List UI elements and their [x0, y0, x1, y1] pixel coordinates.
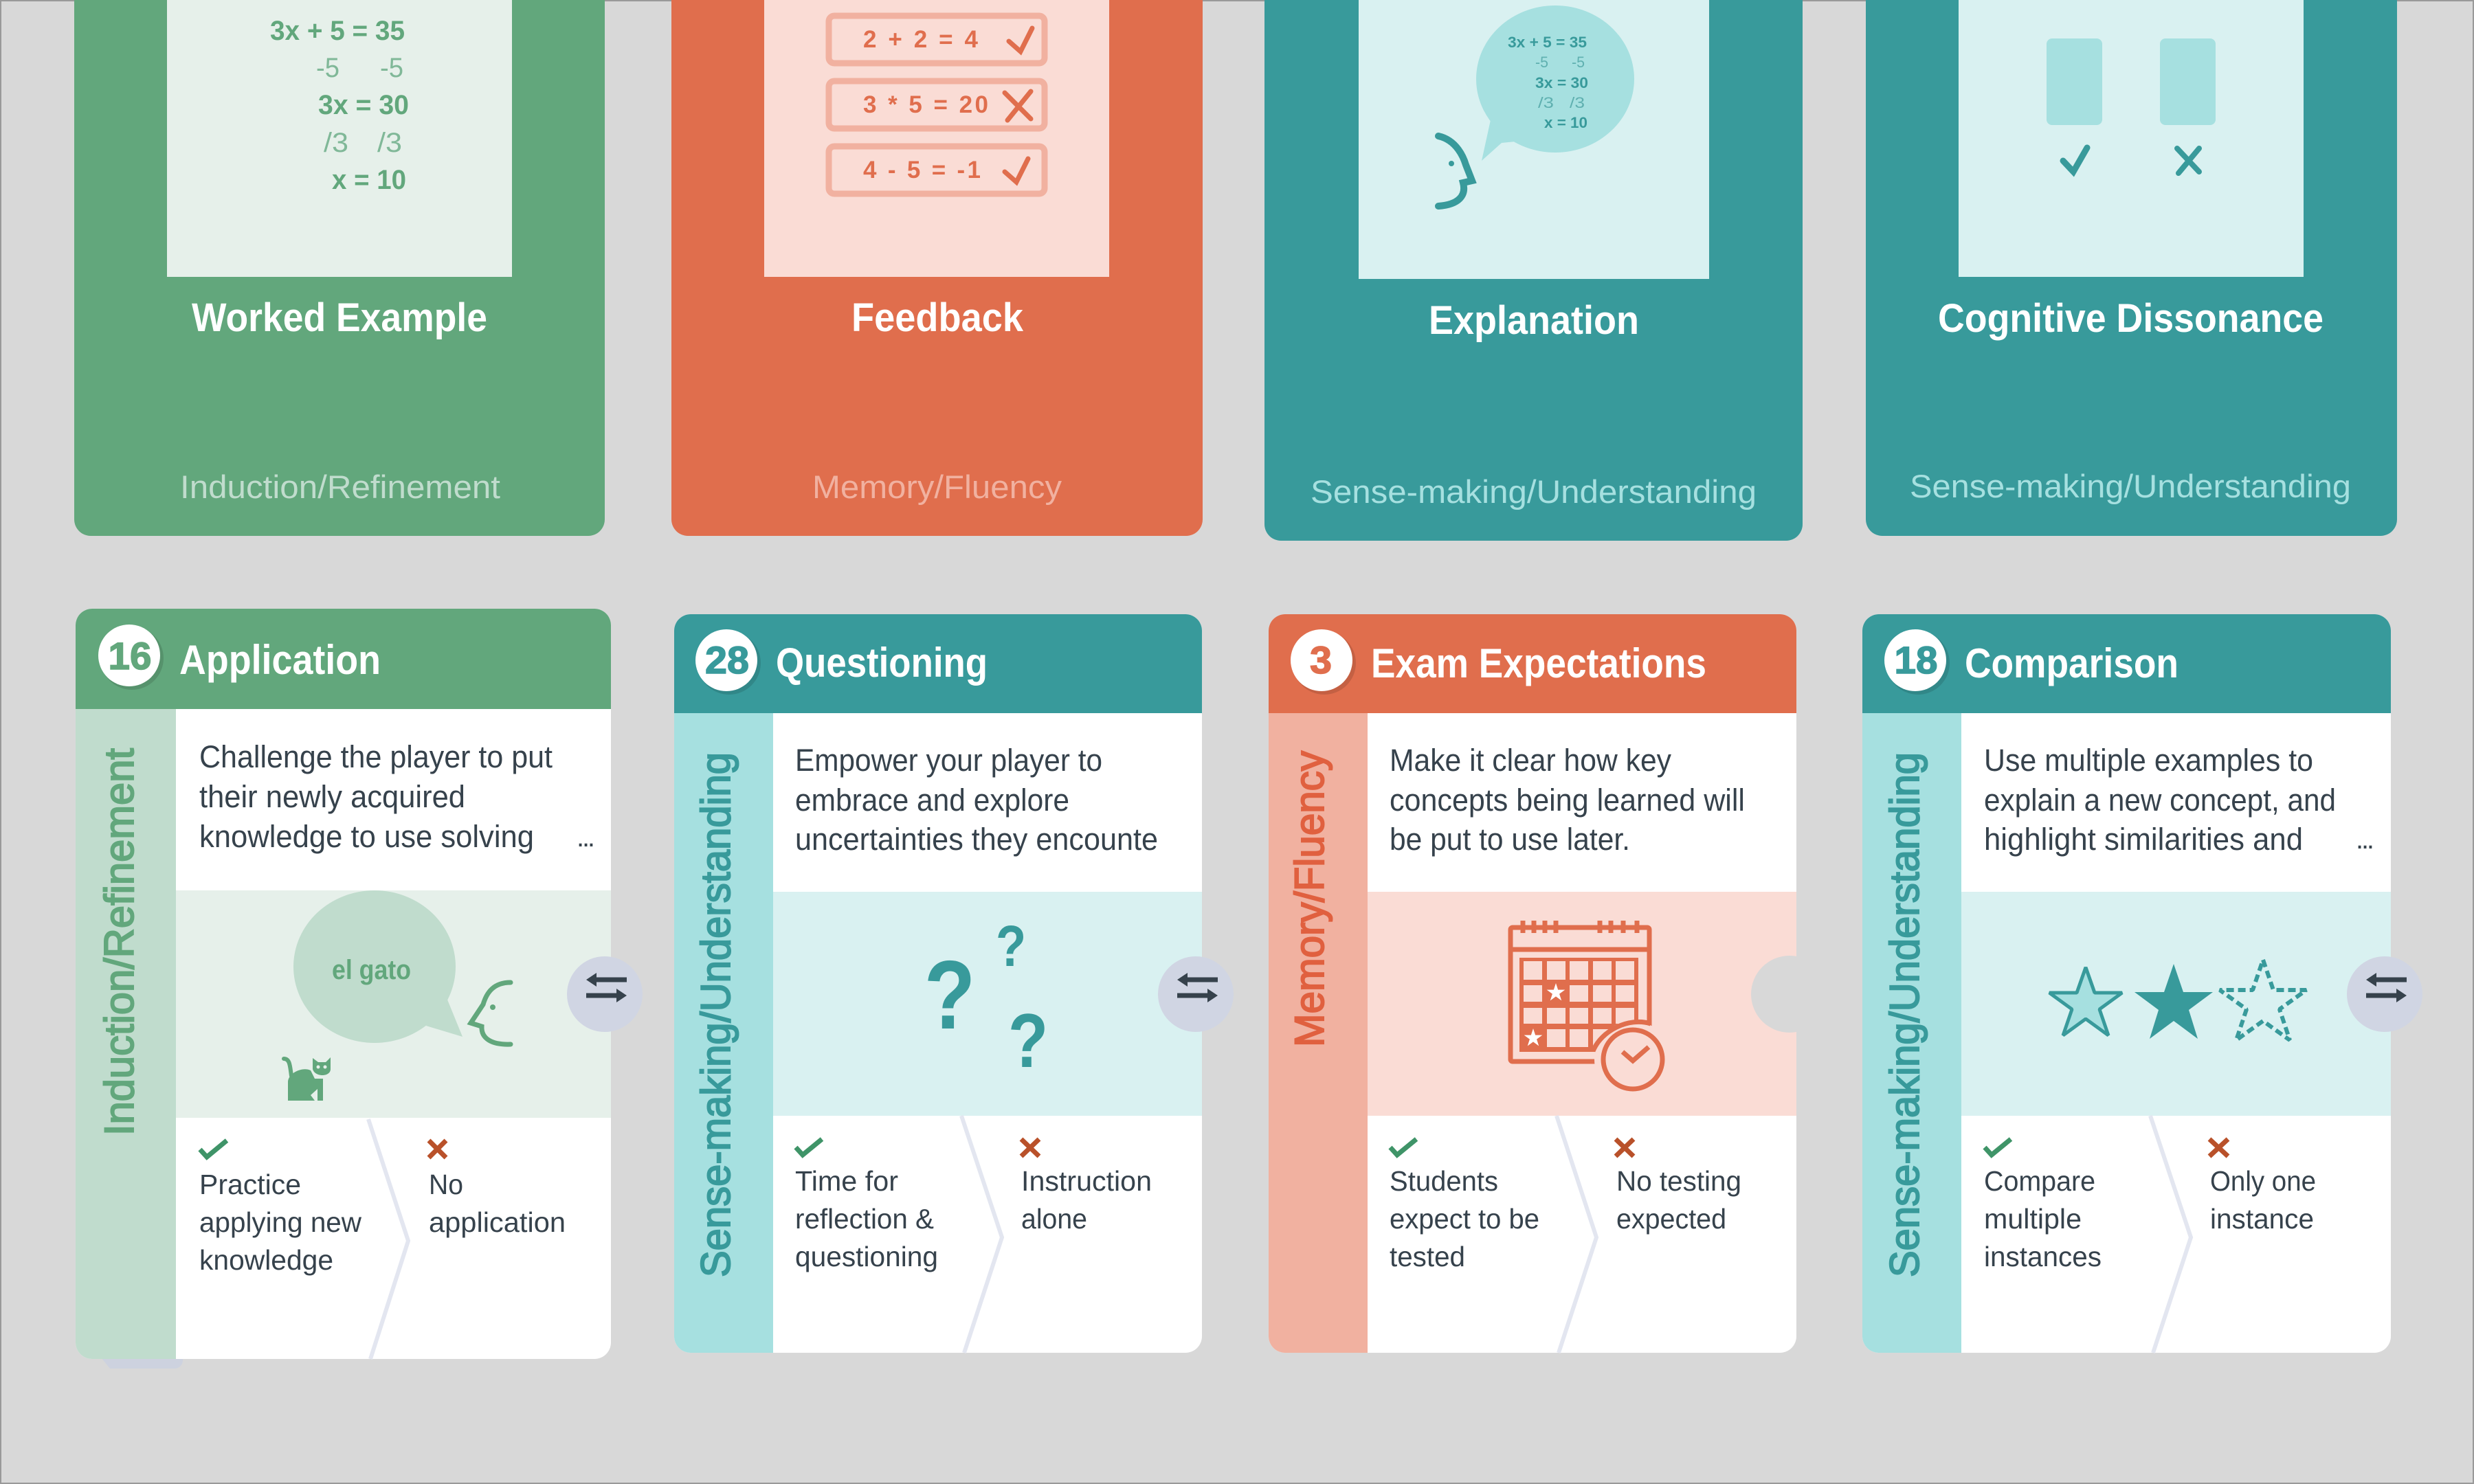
do example [1984, 1139, 2102, 1272]
don't example [1616, 1139, 1741, 1235]
description [1984, 743, 2376, 857]
card title: Cognitive Dissonance [1938, 296, 2323, 341]
do and don't divider arrow [961, 1116, 1002, 1353]
do and don't divider arrow [1557, 1116, 1596, 1353]
icon: speech bubble with math: -5 [1535, 54, 1548, 71]
do example: instances [1984, 1241, 2102, 1272]
panel: Questioning card [674, 614, 1234, 1353]
do example: questioning [795, 1241, 938, 1272]
number badge: 18 [1894, 638, 1938, 682]
worked math steps: -5 [380, 53, 403, 83]
icon: speech bubble with math [1476, 5, 1634, 161]
description: be put to use later. [1390, 822, 1630, 857]
description: their newly acquired [199, 779, 465, 814]
number badge: 3 [1310, 638, 1332, 682]
do example [795, 1139, 938, 1272]
illustration: question marks: ? [1008, 998, 1048, 1083]
worked math steps: 3x + 5 = 35 [270, 16, 405, 46]
don't example: alone [1021, 1203, 1087, 1235]
panel: Worked Example card [74, 0, 605, 536]
icon: face profile [1438, 136, 1472, 206]
description: Challenge the player to put [199, 739, 553, 774]
description: concepts being learned will [1390, 783, 1745, 818]
description: explain a new concept, and [1984, 783, 2336, 818]
do example: expect to be [1390, 1203, 1539, 1235]
vertical category label: Induction/Refinement [96, 748, 142, 1136]
icon: speech bubble with math: /3 [1570, 94, 1585, 111]
do example: Compare [1984, 1165, 2095, 1197]
don't example: No testing [1616, 1165, 1741, 1197]
illustration: three stars [1961, 892, 2391, 1116]
number badge [695, 629, 761, 695]
number badge [98, 625, 164, 690]
panel: Feedback card [671, 0, 1203, 536]
illustration: question marks [773, 892, 1202, 1116]
number badge [1884, 629, 1950, 695]
don't example: expected [1616, 1203, 1726, 1235]
feedback rows: 2 + 2 = 4 [863, 26, 979, 53]
do example: applying new [199, 1206, 361, 1238]
vertical category label: Sense-making/Understanding [693, 752, 739, 1277]
panel: Cognitive Dissonance card [1866, 0, 2397, 536]
don't example [429, 1140, 566, 1238]
don't example: No [429, 1169, 463, 1200]
description [795, 743, 1158, 857]
description [199, 739, 597, 854]
worked math steps: /3 [324, 128, 348, 158]
do example: multiple [1984, 1203, 2082, 1235]
illustration: speech bubble, face and cat [176, 890, 611, 1118]
do example: Practice [199, 1169, 301, 1200]
number badge [1291, 629, 1356, 695]
illustration: question marks: ? [924, 941, 975, 1050]
icon: matching and non-matching cards [2047, 38, 2216, 173]
do and don't divider arrow [2150, 1116, 2191, 1353]
don't example: application [429, 1206, 566, 1238]
illustration: question marks: ? [996, 914, 1026, 978]
don't example: Only one [2210, 1165, 2316, 1197]
panel: Application card [76, 609, 643, 1369]
icon: swap button [1158, 956, 1234, 1032]
description [1390, 743, 1745, 857]
illustration: calendar and clock [1368, 892, 1828, 1116]
icon: speech bubble with math: /3 [1538, 94, 1554, 111]
heading: Application [179, 637, 381, 683]
icon: speech bubble with math: 3x = 30 [1535, 74, 1588, 91]
illustration: speech bubble, face and cat: el gato [332, 955, 411, 985]
don't example [1021, 1139, 1152, 1235]
worked math steps: 3x = 30 [318, 90, 409, 120]
description: highlight similarities and [1984, 822, 2303, 857]
vertical category label: Memory/Fluency [1286, 751, 1333, 1047]
icon: speech bubble with math: x = 10 [1544, 114, 1587, 131]
description: Make it clear how key [1390, 743, 1671, 778]
worked math steps: -5 [316, 53, 339, 83]
description: uncertainties they encounte [795, 822, 1158, 857]
description: ... [2356, 824, 2376, 855]
number badge: 28 [705, 638, 749, 682]
heading: Exam Expectations [1371, 640, 1706, 686]
heading: Comparison [1965, 640, 2178, 686]
icon: speech bubble with math: 3x + 5 = 35 [1508, 34, 1587, 51]
panel: Exam Expectations card [1269, 614, 1828, 1353]
feedback rows: 4 - 5 = -1 [863, 157, 981, 183]
worked math steps: x = 10 [332, 165, 406, 195]
panel: Explanation card [1264, 0, 1803, 541]
worked math steps: /3 [377, 128, 402, 158]
description: ... [577, 822, 597, 853]
don't example: instance [2210, 1203, 2314, 1235]
do example: Time for [795, 1165, 898, 1197]
do example: tested [1390, 1241, 1465, 1272]
do example: Students [1390, 1165, 1498, 1197]
vertical category label: Sense-making/Understanding [1882, 752, 1928, 1277]
do example: reflection & [795, 1203, 934, 1235]
icon: swap button [2347, 956, 2422, 1032]
number badge: 16 [109, 634, 151, 677]
do and don't divider arrow [368, 1119, 408, 1359]
icon: swap button [567, 956, 643, 1032]
do example [1390, 1139, 1539, 1272]
category label: Memory/Fluency [812, 469, 1062, 505]
feedback rows [829, 16, 1045, 194]
category label: Sense-making/Understanding [1311, 473, 1757, 510]
category label: Induction/Refinement [180, 469, 500, 505]
don't example [2209, 1139, 2316, 1235]
description: embrace and explore [795, 783, 1069, 818]
panel: Comparison card [1862, 614, 2422, 1353]
description: Empower your player to [795, 743, 1102, 778]
category label: Sense-making/Understanding [1910, 468, 2351, 504]
description: Use multiple examples to [1984, 743, 2313, 778]
do example [199, 1140, 361, 1276]
icon: speech bubble with math: -5 [1572, 54, 1585, 71]
don't example: Instruction [1021, 1165, 1152, 1197]
worked math steps [270, 16, 409, 195]
card title: Worked Example [192, 295, 487, 340]
do example: knowledge [199, 1244, 333, 1276]
description: knowledge to use solving [199, 819, 534, 854]
heading: Questioning [776, 640, 988, 686]
card title: Feedback [851, 295, 1024, 340]
feedback rows: 3 * 5 = 20 [863, 91, 988, 118]
card title: Explanation [1429, 298, 1639, 343]
